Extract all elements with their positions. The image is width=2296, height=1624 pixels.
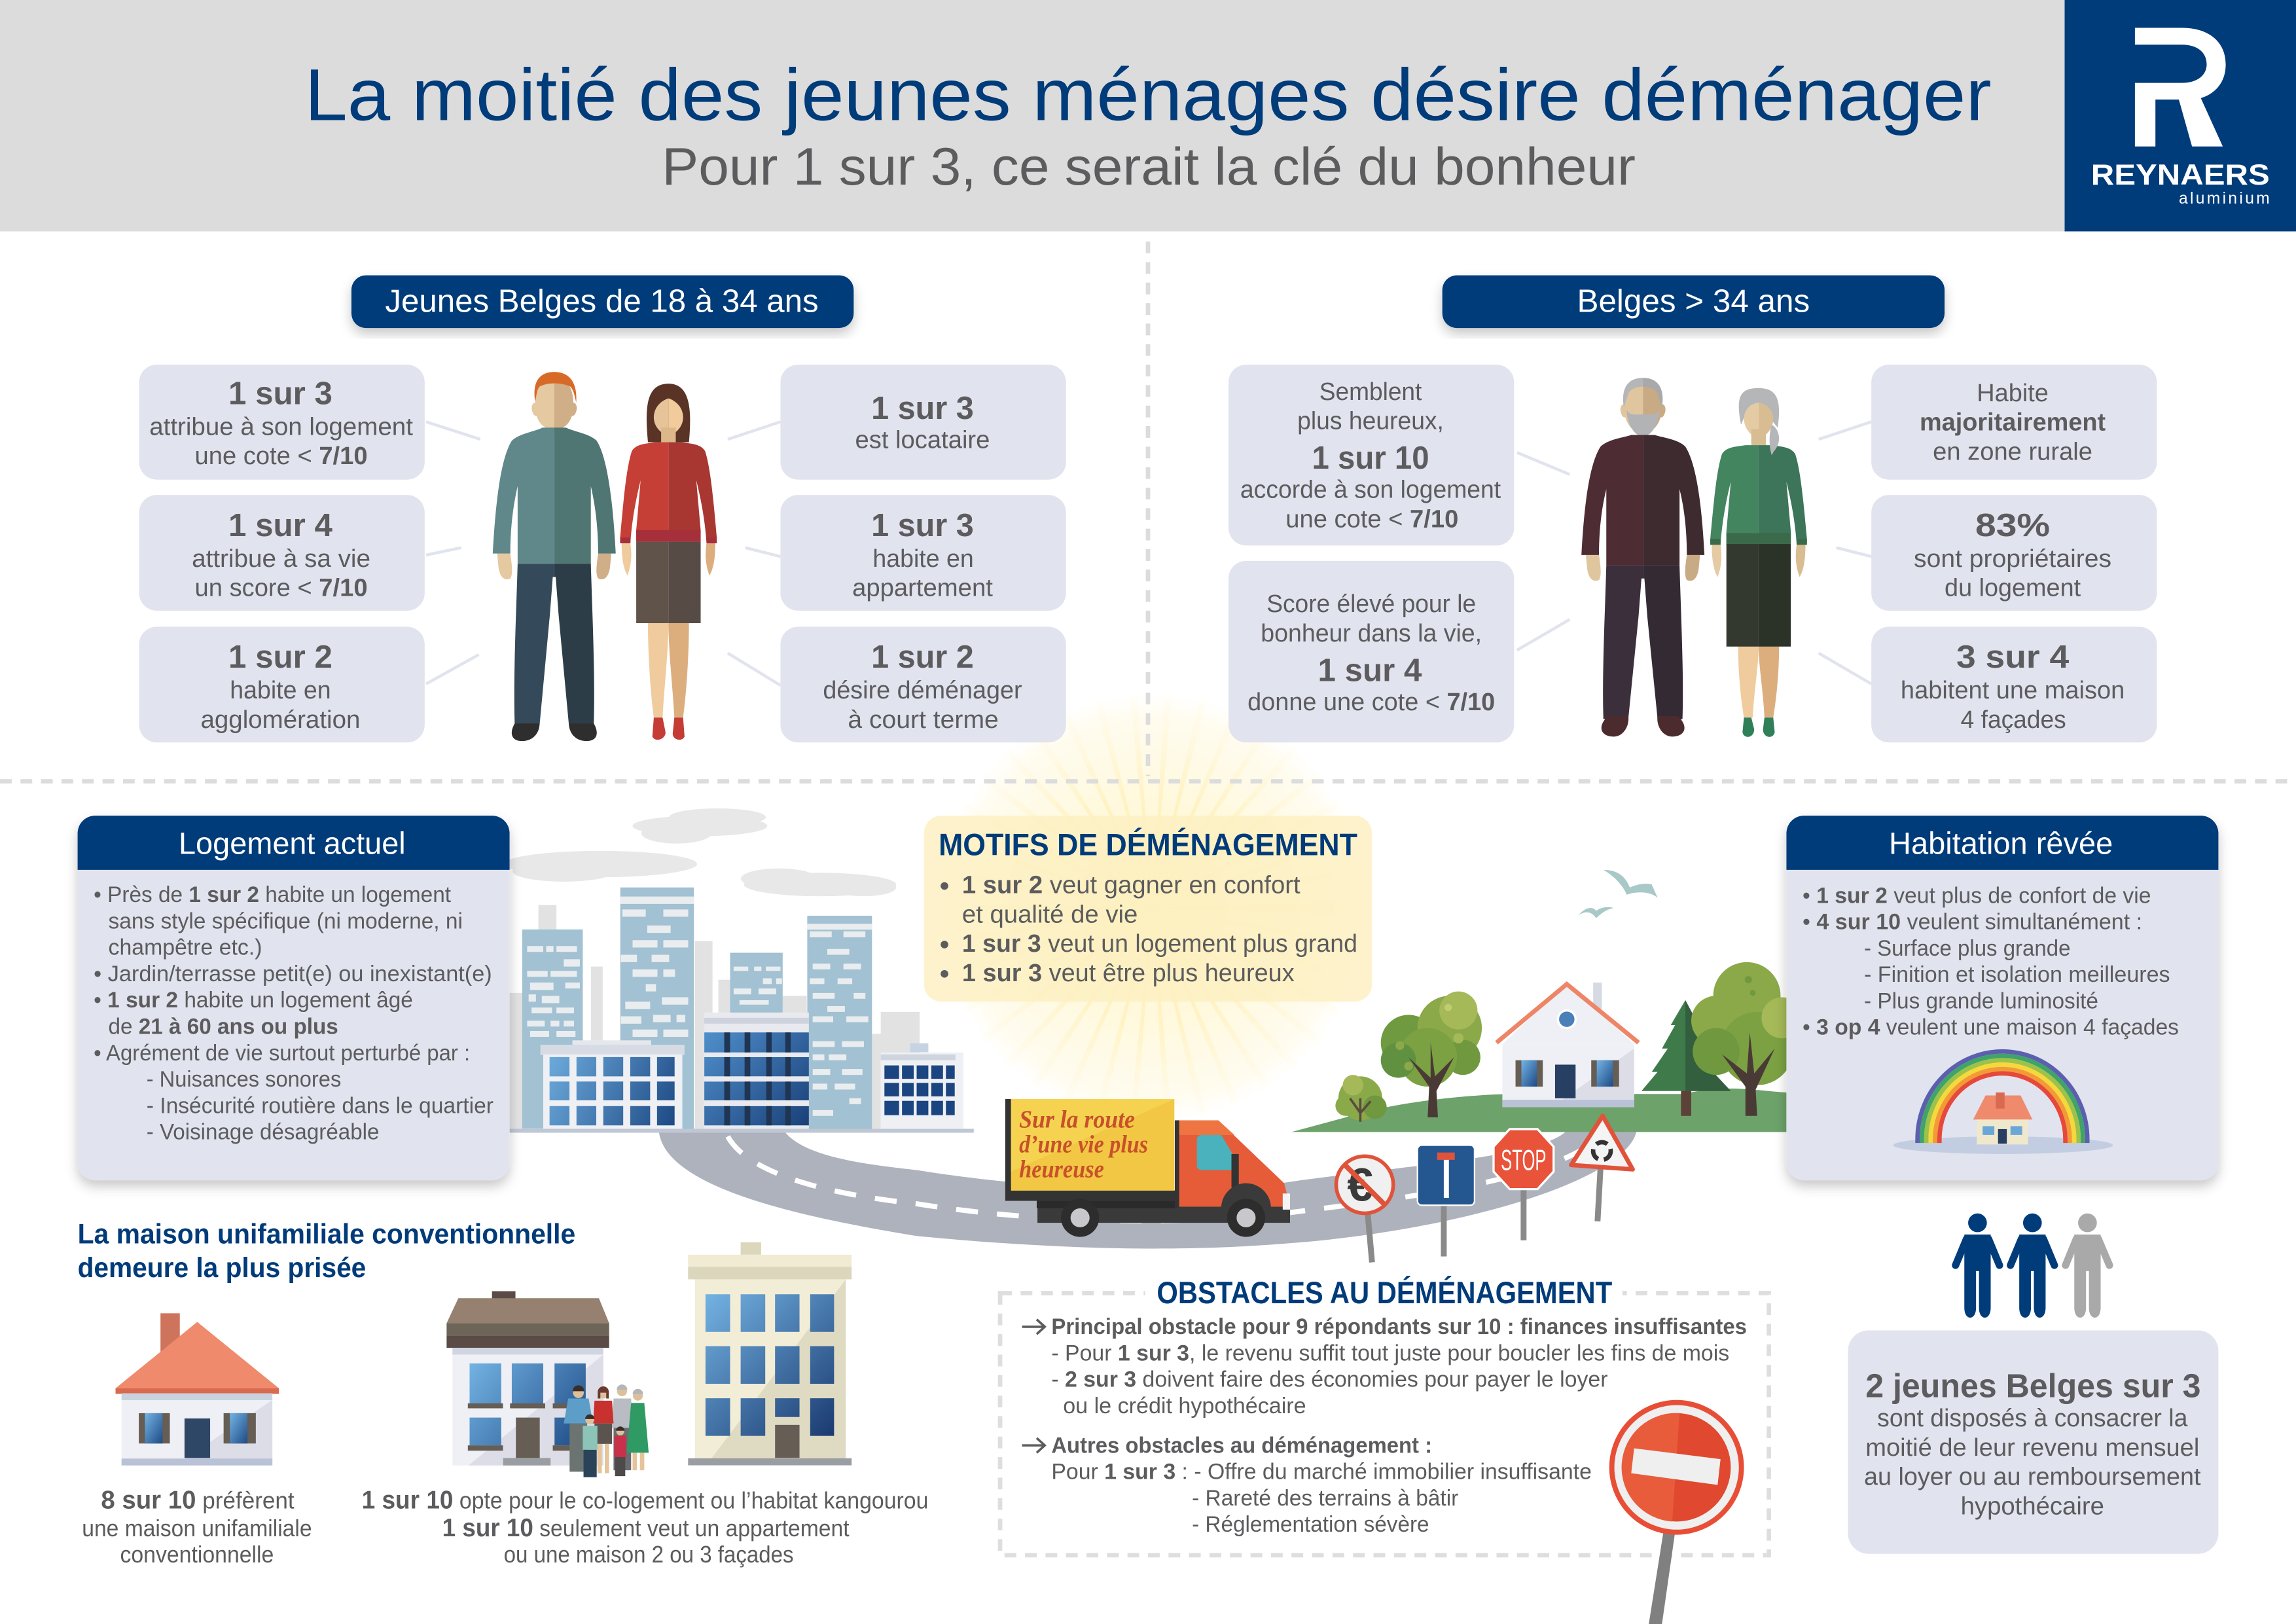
pill heading: older Belgians	[1443, 276, 1945, 328]
stat card: 1 sur 3 appartement	[780, 495, 1066, 611]
stat card: 83%: du logement	[1945, 575, 2081, 602]
stat card: zone rurale: en zone rurale	[1933, 438, 2092, 465]
panel: habitation rêvée: - Surface plus grande	[1864, 936, 2070, 961]
stat card: 1 sur 2 agglomération: habite en	[230, 677, 331, 704]
panel: logement actuel: de 21 à 60 ans ou plus	[109, 1014, 338, 1039]
stat card: 1 sur 3 logement	[139, 365, 425, 480]
dashed section dividers	[0, 242, 2296, 782]
person: mother	[593, 1386, 613, 1473]
text: 8 sur 10	[82, 1486, 312, 1568]
birds	[1579, 870, 1658, 918]
person: grandfather	[612, 1384, 632, 1470]
panel: habitation rêvée: • 4 sur 10 veulent simultanément :	[1803, 910, 2142, 935]
stat card: 1 sur 2 déménager: désire déménager	[823, 677, 1022, 704]
panel: motifs de déménagement: 1 sur 3 veut un logement plus grand	[962, 930, 1357, 958]
stat card: 3 sur 4: 3 sur 4	[1956, 639, 2070, 675]
panel: obstacles au déménagement	[1000, 1275, 1769, 1555]
stat card: semblent plus heureux: plus heureux,	[1297, 408, 1444, 435]
arrow: principal obstacle	[1022, 1320, 1045, 1334]
road	[510, 1128, 1636, 1248]
text: 1 sur 10 kangourou	[362, 1486, 928, 1568]
stat card: 1 sur 3 appartement: 1 sur 3	[871, 507, 974, 543]
callout: 2 jeunes Belges sur 3: moitié de leur revenu mensuel	[1865, 1434, 2199, 1462]
panel: habitation rêvée: • 1 sur 2 veut plus de confort de vie	[1803, 883, 2151, 908]
text: 1 sur 10 kangourou: 1 sur 10 opte pour le co-logement ou l’habitat kangourou	[362, 1486, 928, 1514]
truck wheels and chassis	[1005, 1191, 1290, 1223]
panel: motifs de déménagement: 1 sur 3 veut être plus heureux	[962, 960, 1295, 987]
heading: maison unifamiliale: La maison unifamiliale conventionnelle	[78, 1219, 575, 1250]
figure: young woman	[620, 384, 717, 740]
text: 1 sur 10 kangourou: 1 sur 10 seulement veut un appartement	[442, 1514, 850, 1542]
callout: 2 jeunes Belges sur 3: hypothécaire	[1961, 1492, 2104, 1520]
text: 1 sur 10 kangourou: ou une maison 2 ou 3 façades	[504, 1542, 794, 1568]
stat card: 1 sur 3 locataire: est locataire	[855, 427, 990, 454]
road sign: roundabout	[1571, 1116, 1633, 1221]
callout: 2 jeunes Belges sur 3	[1848, 1331, 2218, 1554]
panel: obstacles au déménagement: - 2 sur 3 doivent faire des économies pour payer le loyer	[1051, 1367, 1607, 1392]
house with red roof	[1496, 983, 1638, 1107]
stat card: 1 sur 4 vie: attribue à sa vie	[192, 545, 370, 573]
stat card: 1 sur 3 appartement: appartement	[852, 575, 993, 602]
panel: obstacles au déménagement: - Pour 1 sur 3, le revenu suffit tout juste pour boucler les fins de mois	[1051, 1341, 1729, 1365]
stat card: semblent plus heureux: accorde à son logement	[1240, 477, 1501, 504]
heading: maison unifamiliale	[78, 1219, 575, 1284]
illustration: two-storey house	[446, 1291, 609, 1466]
road sign: no euro: €	[1347, 1159, 1373, 1212]
panel: obstacles au déménagement: - Réglementation sévère	[1192, 1512, 1429, 1537]
truck slogan: d’une vie plus	[1019, 1131, 1148, 1159]
connector lines	[426, 422, 1871, 685]
truck slogan	[1019, 1106, 1148, 1183]
subtitle: Pour 1 sur 3, ce serait la clé du bonheur	[662, 137, 1636, 196]
pill heading: older Belgians: Belges > 34 ans	[1577, 283, 1810, 319]
illustration: city skyline	[510, 888, 963, 1130]
pictogram: 2 of 3 people	[1956, 1214, 2109, 1318]
panel: logement actuel: - Insécurité routière dans le quartier	[147, 1093, 493, 1118]
logo: Reynaers: REYNAERS	[2091, 158, 2270, 191]
stat card: 3 sur 4: 4 façades	[1961, 706, 2066, 734]
panel: habitation rêvée: • 3 op 4 veulent une maison 4 façades	[1803, 1015, 2179, 1040]
panel: logement actuel	[78, 816, 510, 1180]
road sign: no euro	[1336, 1156, 1393, 1262]
panel: habitation rêvée: - Finition et isolation meilleures	[1864, 962, 2170, 987]
panel: habitation rêvée: - Plus grande luminosité	[1864, 988, 2098, 1013]
stat card: 1 sur 3 appartement: habite en	[872, 545, 974, 573]
stat card: score élevé: Score élevé pour le	[1266, 590, 1476, 618]
stat card: 83%	[1871, 495, 2157, 611]
stat card: 3 sur 4	[1871, 627, 2157, 742]
truck slogan: heureuse	[1019, 1156, 1104, 1183]
logo: Reynaers: aluminium	[2179, 190, 2270, 208]
panel: logement actuel: - Voisinage désagréable	[147, 1120, 379, 1145]
icon: no entry sign	[1609, 1400, 1744, 1624]
heading: maison unifamiliale: demeure la plus prisée	[78, 1253, 366, 1284]
panel: obstacles au déménagement: Pour 1 sur 3 : - Offre du marché immobilier insuffisante	[1051, 1460, 1592, 1485]
stat card: 3 sur 4: habitent une maison	[1901, 677, 2125, 704]
person: grandmother	[627, 1389, 649, 1470]
building: front right	[881, 1043, 963, 1128]
stat card: 1 sur 3 locataire	[780, 365, 1066, 480]
truck with slogan	[1005, 1099, 1290, 1237]
stat card: semblent plus heureux: Semblent	[1319, 378, 1422, 406]
panel: logement actuel: • Près de 1 sur 2 habite un logement	[94, 882, 451, 907]
panel: habitation rêvée	[1786, 816, 2218, 1180]
tree: small bush	[1335, 1075, 1387, 1122]
text: 8 sur 10: une maison unifamiliale	[82, 1515, 312, 1542]
illustration: extended family	[564, 1384, 649, 1477]
road sign: stop	[1494, 1129, 1554, 1240]
stat card: 1 sur 4 vie: 1 sur 4	[228, 507, 332, 543]
stat card: zone rurale	[1871, 365, 2157, 480]
figure: young man	[493, 372, 616, 741]
pill heading: young Belgians: Jeunes Belges de 18 à 34 ans	[385, 283, 819, 319]
stat card: 1 sur 3 logement: une cote < 7/10	[195, 442, 368, 470]
panel: obstacles au déménagement: OBSTACLES AU DÉMÉNAGEMENT	[1157, 1275, 1612, 1310]
truck cab	[1175, 1120, 1290, 1210]
panel: logement actuel: • Agrément de vie surtout perturbé par :	[94, 1041, 470, 1066]
stat card: semblent plus heureux: 1 sur 10	[1312, 440, 1429, 476]
text: 8 sur 10: conventionnelle	[120, 1542, 274, 1568]
stat card: 83%: 83%	[1975, 507, 2050, 543]
title: La moitié des jeunes ménages désire déménager	[304, 54, 1992, 135]
stat card: 1 sur 2 déménager	[780, 627, 1066, 742]
panel: obstacles au déménagement: - Rareté des terrains à bâtir	[1192, 1486, 1458, 1511]
illustration: single family house	[116, 1313, 279, 1466]
panel: logement actuel: Logement actuel	[179, 825, 406, 860]
header band	[0, 0, 2296, 231]
tree: pine	[1641, 1000, 1731, 1116]
person: father	[564, 1385, 593, 1471]
panel: obstacles au déménagement: Autres obstacles au déménagement :	[1051, 1433, 1432, 1458]
panel: habitation rêvée: Habitation rêvée	[1889, 825, 2113, 860]
stat card: 1 sur 4 vie	[139, 495, 425, 611]
building: front centre	[704, 1013, 809, 1128]
panel: obstacles au déménagement: ou le crédit hypothécaire	[1063, 1394, 1306, 1418]
stat card: 1 sur 3 logement: 1 sur 3	[228, 375, 332, 411]
road sign: dead end	[1418, 1146, 1475, 1257]
sun glow	[939, 694, 1366, 1122]
illustration: apartment building	[688, 1242, 852, 1466]
stat card: score élevé: donne une cote < 7/10	[1247, 689, 1495, 716]
stat card: semblent plus heureux	[1229, 365, 1514, 545]
callout: 2 jeunes Belges sur 3: 2 jeunes Belges sur 3	[1865, 1366, 2201, 1404]
panel: logement actuel: • 1 sur 2 habite un logement âgé	[94, 988, 413, 1013]
stat card: score élevé	[1229, 561, 1514, 742]
logo: Reynaers	[2065, 0, 2296, 231]
tree: left large	[1381, 992, 1482, 1117]
icon: rainbow with house	[1893, 1051, 2113, 1154]
stat card: 1 sur 2 agglomération: 1 sur 2	[228, 639, 332, 675]
building: front left	[541, 1040, 685, 1129]
clouds	[504, 808, 896, 896]
stat card: zone rurale: majoritairement	[1920, 409, 2106, 437]
callout: 2 jeunes Belges sur 3: au loyer ou au remboursement	[1864, 1464, 2201, 1491]
panel: motifs de déménagement: 1 sur 2 veut gagner en confort	[962, 872, 1300, 899]
person: boy	[583, 1415, 598, 1477]
road sign: stop: STOP	[1501, 1144, 1547, 1177]
callout: 2 jeunes Belges sur 3: sont disposés à consacrer la	[1877, 1405, 2188, 1432]
text: 8 sur 10: 8 sur 10 préfèrent	[101, 1486, 295, 1514]
figure: older woman	[1710, 388, 1807, 737]
stat card: 1 sur 2 agglomération	[139, 627, 425, 742]
stat card: 1 sur 2 agglomération: agglomération	[201, 706, 360, 734]
panel: logement actuel: sans style spécifique (ni moderne, ni	[109, 909, 463, 933]
pill heading: young Belgians	[351, 276, 853, 328]
stat card: 1 sur 3 locataire: 1 sur 3	[871, 390, 974, 426]
green hill	[1291, 1089, 1786, 1132]
tree: right large	[1691, 962, 1803, 1116]
truck slogan: Sur la route	[1019, 1106, 1135, 1134]
stat card: 1 sur 3 logement: attribue à son logement	[149, 413, 413, 441]
arrow: autres obstacles	[1022, 1438, 1045, 1453]
panel: obstacles au déménagement: Principal obstacle pour 9 répondants sur 10 : finances insuffisantes	[1051, 1314, 1747, 1339]
panel: motifs de déménagement: et qualité de vie	[962, 901, 1138, 928]
person: girl	[615, 1426, 626, 1476]
panel: logement actuel: • Jardin/terrasse petit(e) ou inexistant(e)	[94, 962, 492, 986]
stat card: 1 sur 2 déménager: à court terme	[848, 706, 999, 734]
stat card: score élevé: 1 sur 4	[1318, 652, 1422, 688]
stat card: 1 sur 2 déménager: 1 sur 2	[871, 639, 974, 675]
stat card: semblent plus heureux: une cote < 7/10	[1285, 505, 1458, 533]
panel: logement actuel: champêtre etc.)	[109, 935, 262, 960]
figure: older man	[1581, 378, 1704, 736]
panel: logement actuel: - Nuisances sonores	[147, 1067, 341, 1092]
panel: motifs de déménagement: MOTIFS DE DÉMÉNAGEMENT	[939, 827, 1357, 862]
stat card: zone rurale: Habite	[1977, 380, 2049, 407]
stat card: score élevé: bonheur dans la vie,	[1261, 620, 1482, 647]
stat card: 1 sur 4 vie: un score < 7/10	[195, 575, 368, 602]
panel: motifs de déménagement	[924, 816, 1372, 1001]
stat card: 83%: sont propriétaires	[1914, 545, 2111, 573]
